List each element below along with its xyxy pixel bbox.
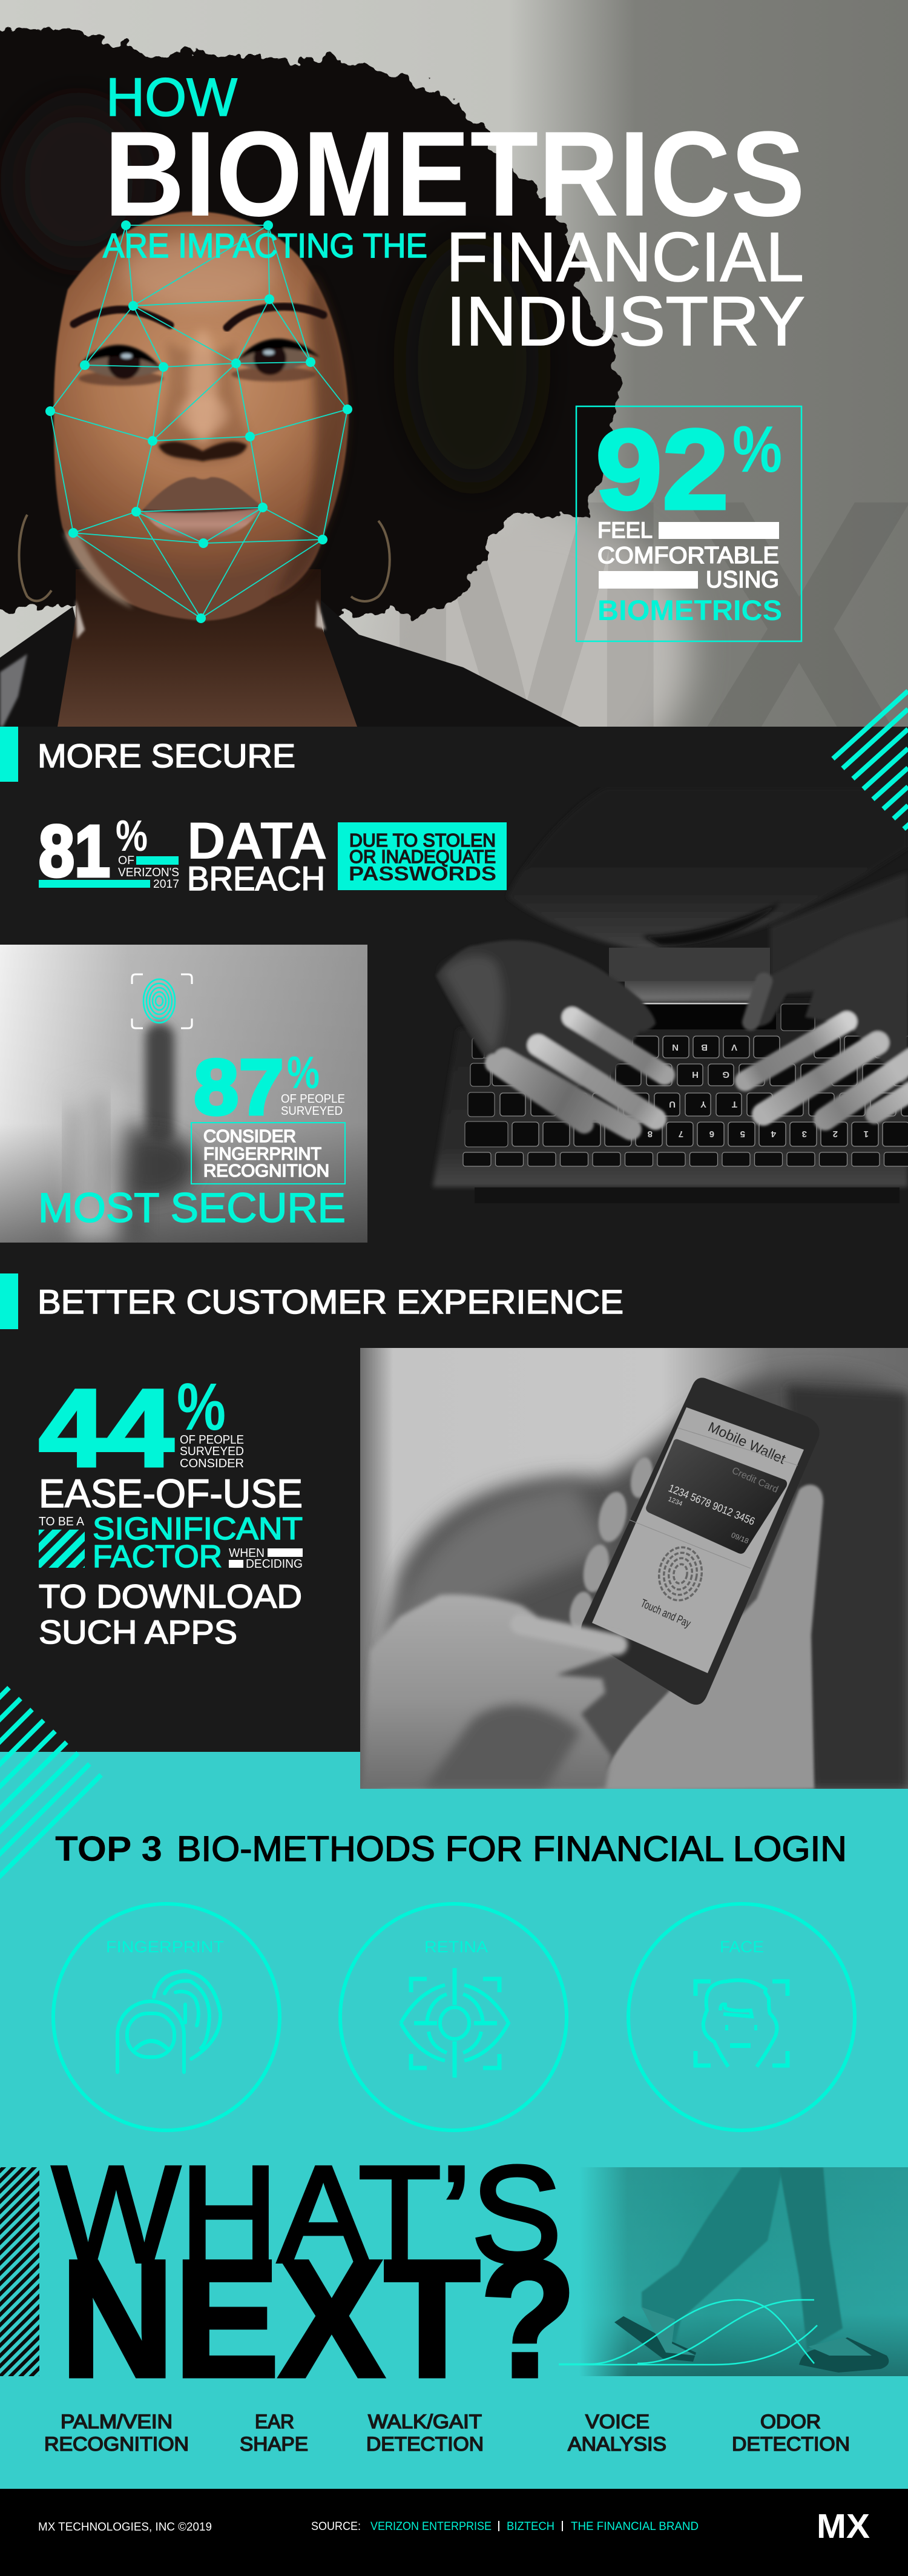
key legends: 3	[802, 1129, 807, 1139]
key legends: B	[701, 1042, 708, 1052]
callout: 92% comfortable using biometrics: COMFORTABLE	[597, 543, 779, 569]
method: walk/gait detection: DETECTION	[366, 2433, 484, 2455]
keyboard body	[433, 999, 908, 1187]
stat: 81% of Verizon's 2017 data breach: 2017	[153, 878, 179, 891]
panel: fingerprint most secure: CONSIDER	[203, 1127, 296, 1146]
stat: 81% of Verizon's 2017 data breach: VERIZON'S	[118, 866, 179, 879]
heading: what's next: WHAT’S	[52, 2138, 562, 2291]
icon circle: face	[628, 1904, 855, 2130]
key legends: 1	[864, 1129, 869, 1139]
stat: 44% ease-of-use: %	[177, 1370, 226, 1444]
heading: top 3 bio-methods: TOP 3	[55, 1829, 162, 1869]
key legends: 7	[679, 1129, 683, 1139]
stat: 44% ease-of-use: TO DOWNLOAD	[39, 1577, 302, 1615]
callout: due to stolen or inadequate passwords: DUE TO STOLEN	[349, 830, 496, 851]
stat: 44% ease-of-use	[39, 1366, 303, 1651]
left hand	[436, 940, 665, 1129]
diagonal stripes: top right of security section	[833, 691, 908, 829]
method: palm/vein recognition: RECOGNITION	[44, 2433, 189, 2455]
stat: 81% of Verizon's 2017 data breach	[39, 810, 327, 897]
stat: 81% of Verizon's 2017 data breach: %	[116, 812, 148, 860]
footer: MX	[817, 2507, 870, 2546]
panel: fingerprint most secure: SURVEYED	[281, 1105, 343, 1118]
icon circle: retina: RETINA	[424, 1938, 488, 1956]
stat: 44% ease-of-use: TO BE A	[39, 1515, 85, 1528]
panel: fingerprint most secure	[0, 945, 367, 1243]
title: FINANCIAL	[446, 219, 804, 296]
phone: 09/18	[730, 1531, 750, 1545]
section heading: more secure: MORE SECURE	[38, 737, 295, 774]
method: walk/gait detection: WALK/GAIT	[368, 2411, 482, 2432]
footer: MX TECHNOLOGIES, INC ©2019	[38, 2521, 212, 2534]
hood	[511, 870, 867, 948]
method: odor detection: DETECTION	[732, 2433, 850, 2455]
key legends: 8	[648, 1129, 653, 1139]
stat: 44% ease-of-use: EASE-OF-USE	[39, 1471, 303, 1516]
footer: VERIZON ENTERPRISE	[370, 2520, 492, 2533]
method: walk/gait detection	[366, 2411, 484, 2455]
stat: 81% of Verizon's 2017 data breach: 81	[39, 810, 110, 892]
dark section background: more secure	[0, 727, 908, 1332]
stat: 81% of Verizon's 2017 data breach: DATA	[187, 812, 327, 870]
right hand	[745, 917, 908, 1119]
heading: what's next: NEXT?	[61, 2226, 576, 2412]
key legends: 2	[833, 1129, 838, 1139]
callout: 92% comfortable using biometrics: FEEL	[597, 518, 653, 543]
stat: 44% ease-of-use: SIGNIFICANT	[93, 1511, 303, 1547]
stat: 44% ease-of-use: WHEN	[229, 1547, 265, 1560]
footer: THE FINANCIAL BRAND	[571, 2520, 699, 2533]
key legends: 4	[771, 1129, 776, 1139]
earrings	[19, 515, 390, 601]
key legends	[648, 1042, 869, 1139]
laptop photo with hooded figure's hands	[432, 870, 908, 1189]
stat: 44% ease-of-use: CONSIDER	[180, 1457, 244, 1470]
jacket	[0, 598, 579, 727]
pointing hand	[363, 1594, 625, 1789]
face	[54, 211, 349, 621]
title: BIOMETRICS	[104, 107, 805, 242]
method: odor detection: ODOR	[760, 2411, 821, 2432]
method: ear shape: SHAPE	[240, 2433, 308, 2455]
method: ear shape: EAR	[255, 2411, 294, 2432]
footer: BIZTECH	[507, 2520, 554, 2533]
panel: fingerprint most secure: OF PEOPLE	[281, 1092, 345, 1106]
phone: 1234	[667, 1496, 683, 1508]
title: HOW	[106, 67, 237, 127]
key legends: 6	[709, 1129, 714, 1139]
callout: 92% comfortable using biometrics: %	[732, 412, 782, 486]
section heading: more secure	[0, 727, 295, 782]
method: odor detection	[732, 2411, 850, 2455]
heading: what's next	[52, 2138, 576, 2412]
list: future biometric methods	[44, 2411, 850, 2455]
photo: hands holding phone with mobile wallet	[360, 1348, 908, 1789]
section heading: better customer experience: BETTER CUSTOMER EXPERIENCE	[38, 1283, 623, 1321]
stat: 81% of Verizon's 2017 data breach: OF	[118, 854, 134, 867]
callout: 92% comfortable using biometrics: BIOMETRICS	[597, 594, 782, 626]
holding hand behind phone	[567, 1455, 823, 1789]
icon circle: face: FACE	[720, 1938, 764, 1956]
icon: fingerprint scan	[132, 974, 192, 1028]
hero photo: woman's face on grey background	[0, 0, 908, 727]
diagonal stripes: bottom left of customer section	[0, 1688, 101, 1882]
phone: Credit Card	[730, 1465, 780, 1495]
section heading: better customer experience	[0, 1273, 623, 1329]
stat: 81% of Verizon's 2017 data breach: BREACH	[187, 859, 325, 897]
method: ear shape	[240, 2411, 308, 2455]
callout: 92% comfortable using biometrics	[576, 406, 801, 641]
key legends: T	[732, 1099, 737, 1109]
method: voice analysis	[568, 2411, 666, 2455]
teal background: top 3 and what's next	[0, 1752, 908, 2489]
eyebrows	[74, 306, 323, 328]
title: ARE IMPACTING THE	[103, 226, 427, 265]
heading: top 3 bio-methods: BIO-METHODS FOR FINANCIAL LOGIN	[177, 1829, 847, 1869]
phone: Mobile Wallet	[706, 1419, 788, 1467]
callout: due to stolen or inadequate passwords	[338, 822, 507, 890]
stat: 44% ease-of-use: DECIDING	[246, 1557, 303, 1571]
stat: 44% ease-of-use: 44	[39, 1366, 174, 1490]
panel: fingerprint most secure: FINGERPRINT	[203, 1144, 321, 1164]
method: palm/vein recognition: PALM/VEIN	[61, 2411, 173, 2432]
key legends: V	[731, 1042, 737, 1052]
title: INDUSTRY	[446, 283, 805, 360]
callout: 92% comfortable using biometrics: 92	[596, 406, 729, 533]
title	[103, 67, 805, 360]
stat: 44% ease-of-use: FACTOR	[93, 1539, 222, 1574]
stat: 44% ease-of-use: OF PEOPLE	[180, 1433, 244, 1447]
footer	[0, 2489, 908, 2576]
lips	[143, 477, 262, 539]
callout: due to stolen or inadequate passwords: PASSWORDS	[349, 862, 496, 885]
phone	[581, 1378, 820, 1705]
key legends: G	[722, 1069, 729, 1080]
face-recognition mesh	[45, 220, 352, 623]
keyboard keys	[462, 1035, 908, 1167]
panel: fingerprint most secure: 87	[194, 1043, 284, 1131]
panel: fingerprint most secure: MOST SECURE	[38, 1184, 346, 1231]
hatch block: what's next	[0, 2167, 39, 2376]
phone: Touch and Pay	[639, 1597, 693, 1631]
key legends: U	[669, 1099, 676, 1109]
method: palm/vein recognition	[44, 2411, 189, 2455]
key legends: Y	[700, 1099, 706, 1109]
key legends: 5	[740, 1129, 745, 1139]
icon circle: fingerprint	[53, 1904, 280, 2130]
laptop lid	[609, 948, 770, 982]
panel: fingerprint most secure: %	[287, 1047, 320, 1098]
phone: 1234 5678 9012 3456	[667, 1482, 757, 1528]
key legends: H	[692, 1069, 699, 1080]
method: voice analysis: VOICE	[585, 2411, 650, 2432]
eyes	[79, 339, 320, 386]
gait waves	[559, 2300, 817, 2365]
footer: SOURCE:	[311, 2520, 361, 2533]
neck and chest	[58, 569, 357, 727]
key legends: N	[672, 1042, 679, 1052]
callout: due to stolen or inadequate passwords: OR INADEQUATE	[349, 846, 496, 867]
icon circle: retina	[340, 1904, 567, 2130]
method: voice analysis: ANALYSIS	[568, 2433, 666, 2455]
panel: fingerprint most secure: RECOGNITION	[203, 1161, 329, 1181]
photo: walking legs with gait waves	[559, 2167, 908, 2376]
stat: 44% ease-of-use: SUCH APPS	[39, 1613, 237, 1651]
stat: 44% ease-of-use: SURVEYED	[180, 1445, 244, 1458]
icon circle: fingerprint: FINGERPRINT	[106, 1938, 224, 1956]
nose	[154, 330, 249, 464]
callout: 92% comfortable using biometrics: USING	[706, 567, 779, 593]
